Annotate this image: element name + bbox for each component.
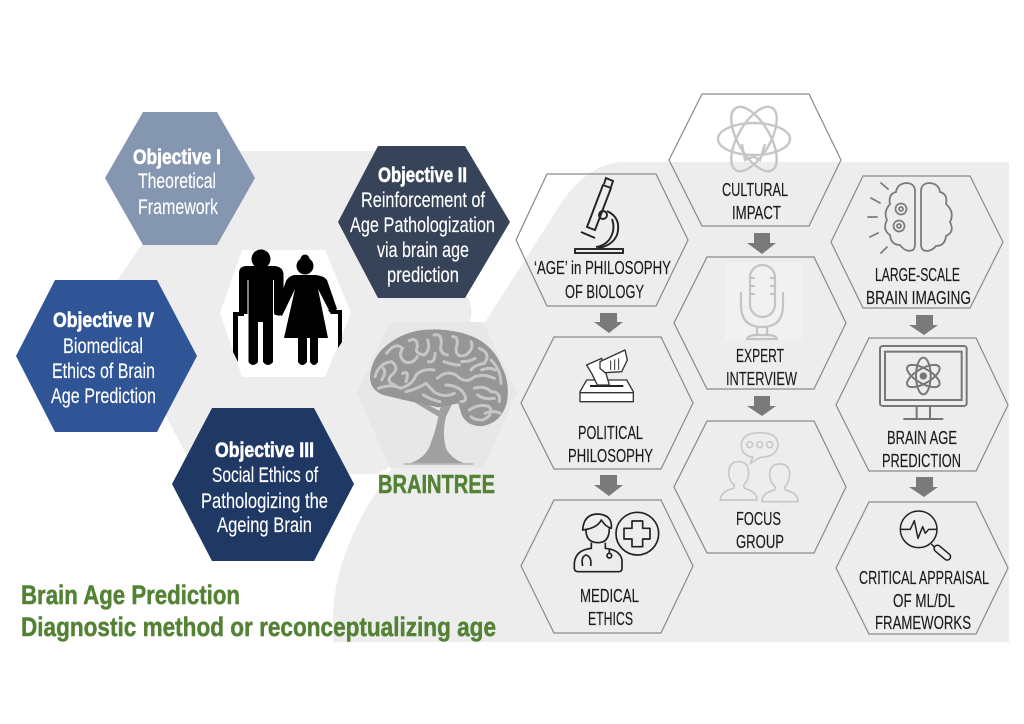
panel: Objective IV: Ethics of Brain bbox=[52, 359, 155, 383]
panel: Brain Age Prediction: BRAIN AGE bbox=[887, 427, 957, 448]
panel: Focus Group: FOCUS bbox=[736, 508, 781, 529]
title: Brain Age Prediction: Brain Age Prediction bbox=[21, 580, 240, 610]
panel: Objective I: Theoretical bbox=[138, 169, 216, 193]
panel: Objective III: Ageing Brain bbox=[217, 513, 312, 537]
subtitle: Diagnostic method or reconceptualizing age: Diagnostic method or reconceptualizing age bbox=[21, 612, 496, 642]
panel: Focus Group: GROUP bbox=[736, 531, 784, 552]
panel: Medical Ethics bbox=[521, 500, 693, 633]
panel: Objective III bbox=[172, 408, 354, 561]
panel: Objective II: via brain age bbox=[377, 238, 469, 262]
panel: Objective II: prediction bbox=[387, 263, 459, 287]
panel: Large-scale brain imaging: BRAIN IMAGING bbox=[866, 287, 971, 308]
icon: microphone bbox=[725, 262, 802, 340]
panel: Objective II: Age Pathologization bbox=[350, 213, 495, 237]
panel: Expert Interview: INTERVIEW bbox=[726, 368, 797, 389]
panel: Critical Appraisal bbox=[836, 502, 1008, 634]
arrow: political philosophy to medical ethics bbox=[594, 475, 623, 496]
panel: Cultural Impact: IMPACT bbox=[732, 202, 781, 223]
label: BRAINTREE: BRAINTREE bbox=[378, 469, 495, 499]
panel: Critical Appraisal: OF ML/DL bbox=[893, 590, 955, 611]
panel: Critical Appraisal: FRAMEWORKS bbox=[875, 612, 971, 633]
icon: ballot box bbox=[580, 350, 633, 402]
panel: Objective I: Framework bbox=[138, 195, 218, 219]
arrow: brain imaging to brain age prediction bbox=[909, 315, 938, 335]
panel: Objective II bbox=[338, 146, 510, 298]
icon: microscope bbox=[575, 178, 623, 253]
panel: Expert Interview bbox=[674, 257, 846, 389]
icon: atom bbox=[718, 100, 790, 178]
panel: Age in philosophy of biology: OF BIOLOGY bbox=[565, 281, 644, 302]
panel: Objective IV: Age Prediction bbox=[51, 384, 156, 408]
arrow: expert interview to focus group bbox=[747, 396, 776, 416]
arrow: brain age prediction to critical appraisal bbox=[909, 477, 938, 497]
icon: two people with speech bubble bbox=[720, 433, 798, 502]
icon: brain with gears bbox=[868, 183, 952, 253]
panel: Large-scale brain imaging bbox=[831, 176, 1003, 308]
panel: Medical Ethics: MEDICAL bbox=[580, 585, 639, 606]
panel: Age in philosophy of biology bbox=[516, 174, 688, 306]
panel: Objective II: Objective II bbox=[378, 164, 467, 187]
icon: elderly couple bbox=[220, 250, 351, 377]
icon: brain tree bbox=[357, 322, 517, 468]
panel: Objective IV bbox=[16, 280, 197, 432]
panel: Objective I bbox=[105, 112, 255, 245]
panel: Objective IV: Biomedical bbox=[63, 334, 143, 358]
background: left objectives hexagon bbox=[108, 151, 472, 474]
panel: Objective III: Objective III bbox=[215, 439, 314, 462]
arrow: cultural impact to expert interview bbox=[747, 233, 776, 254]
panel: Political Philosophy: POLITICAL bbox=[578, 422, 643, 443]
panel: Age in philosophy of biology: ‘AGE’ in PHILOSOPHY bbox=[534, 257, 671, 278]
icon: magnifier with pulse bbox=[900, 511, 952, 561]
panel: Objective III: Pathologizing the bbox=[201, 489, 328, 513]
panel: Objective III: Social Ethics of bbox=[212, 463, 318, 487]
panel: Brain Age Prediction bbox=[836, 338, 1008, 471]
icon: doctor with medical cross bbox=[574, 512, 659, 572]
panel: Focus Group bbox=[674, 421, 846, 553]
panel: Large-scale brain imaging: LARGE-SCALE bbox=[875, 264, 960, 285]
panel: Cultural Impact bbox=[669, 94, 841, 226]
panel: Objective I: Objective I bbox=[133, 146, 221, 169]
icon: monitor with atom bbox=[880, 346, 967, 419]
panel: Cultural Impact: CULTURAL bbox=[722, 179, 788, 200]
panel: Political Philosophy bbox=[521, 337, 693, 469]
arrow: age to political philosophy bbox=[594, 313, 623, 333]
panel: Expert Interview: EXPERT bbox=[736, 345, 784, 366]
panel: Medical Ethics: ETHICS bbox=[588, 608, 633, 629]
panel: Brain Age Prediction: PREDICTION bbox=[882, 450, 961, 471]
panel: Political Philosophy: PHILOSOPHY bbox=[568, 445, 653, 466]
panel: Objective IV: Objective IV bbox=[53, 309, 154, 332]
background: right methods panel bbox=[333, 162, 1009, 642]
panel: Objective II: Reinforcement of bbox=[361, 188, 485, 212]
